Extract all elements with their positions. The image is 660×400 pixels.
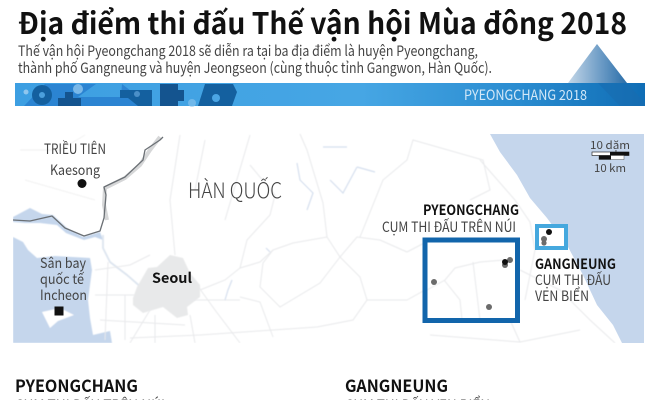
venue dots: Pyeongchang bbox=[431, 257, 513, 310]
banner pattern bbox=[24, 84, 237, 107]
label: Pyeongchang cluster: PYEONGCHANG bbox=[423, 200, 519, 220]
intro text bbox=[18, 40, 492, 78]
marker: Incheon airport bbox=[54, 306, 64, 316]
label: Incheon airport: Sân bay bbox=[40, 253, 87, 273]
scale bar bbox=[590, 137, 630, 176]
intro text: thành phố Gangneung và huyện Jeongseon (cùng thuộc tỉnh Gangwon, Hàn Quốc). bbox=[18, 57, 492, 78]
label: North Korea: TRIỀU TIÊN bbox=[44, 139, 106, 159]
Seoul urban area bbox=[133, 255, 200, 318]
label: Seoul: Seoul bbox=[152, 268, 193, 288]
label: Kaesong: Kaesong bbox=[50, 160, 100, 180]
label: Incheon airport: quốc tế bbox=[40, 269, 84, 289]
label: Incheon airport bbox=[40, 253, 87, 305]
label: South Korea: HÀN QUỐC bbox=[188, 175, 282, 205]
label: Gangneung cluster: VEN BIỂN bbox=[535, 286, 589, 306]
location marker: Pyeongchang cluster box bbox=[425, 240, 518, 320]
marker: Kaesong bbox=[78, 179, 86, 188]
map bbox=[13, 133, 644, 343]
venue dots: Gangneung bbox=[541, 229, 552, 246]
West sea and river bbox=[13, 208, 138, 343]
road network bbox=[95, 134, 615, 343]
map labels bbox=[40, 137, 630, 306]
label: Gangneung cluster: CỤM THI ĐẤU bbox=[535, 270, 611, 290]
section heading: Gangneung bbox=[345, 372, 490, 400]
label: Gangneung cluster bbox=[535, 254, 616, 306]
section heading: Gangneung: GANGNEUNG bbox=[345, 372, 448, 397]
title: Địa điểm thi đấu Thế vận hội Mùa đông 2018 bbox=[18, 1, 627, 43]
label: Pyeongchang cluster bbox=[382, 200, 519, 237]
map land bbox=[13, 133, 644, 343]
scale bar: 10 km bbox=[594, 160, 626, 176]
label: Incheon airport: Incheon bbox=[40, 285, 87, 305]
banner label: PYEONGCHANG 2018 bbox=[464, 85, 587, 105]
border: North and South Korea bbox=[13, 137, 163, 236]
East sea bbox=[490, 134, 644, 343]
scale bar: 10 dặm bbox=[590, 137, 630, 153]
intro text: Thế vận hội Pyeongchang 2018 sẽ diễn ra tại ba địa điểm là huyện Pyeongchang, bbox=[18, 40, 478, 61]
location marker: Gangneung cluster box bbox=[537, 226, 566, 248]
section heading: Pyeongchang: PYEONGCHANG bbox=[15, 372, 138, 397]
label: Gangneung cluster: GANGNEUNG bbox=[535, 254, 616, 274]
icon: mountain peak bbox=[568, 44, 627, 83]
banner bbox=[15, 44, 645, 107]
label: Pyeongchang cluster: CỤM THI ĐẤU TRÊN NÚI bbox=[382, 217, 516, 237]
lakes and rivers bbox=[225, 147, 375, 300]
